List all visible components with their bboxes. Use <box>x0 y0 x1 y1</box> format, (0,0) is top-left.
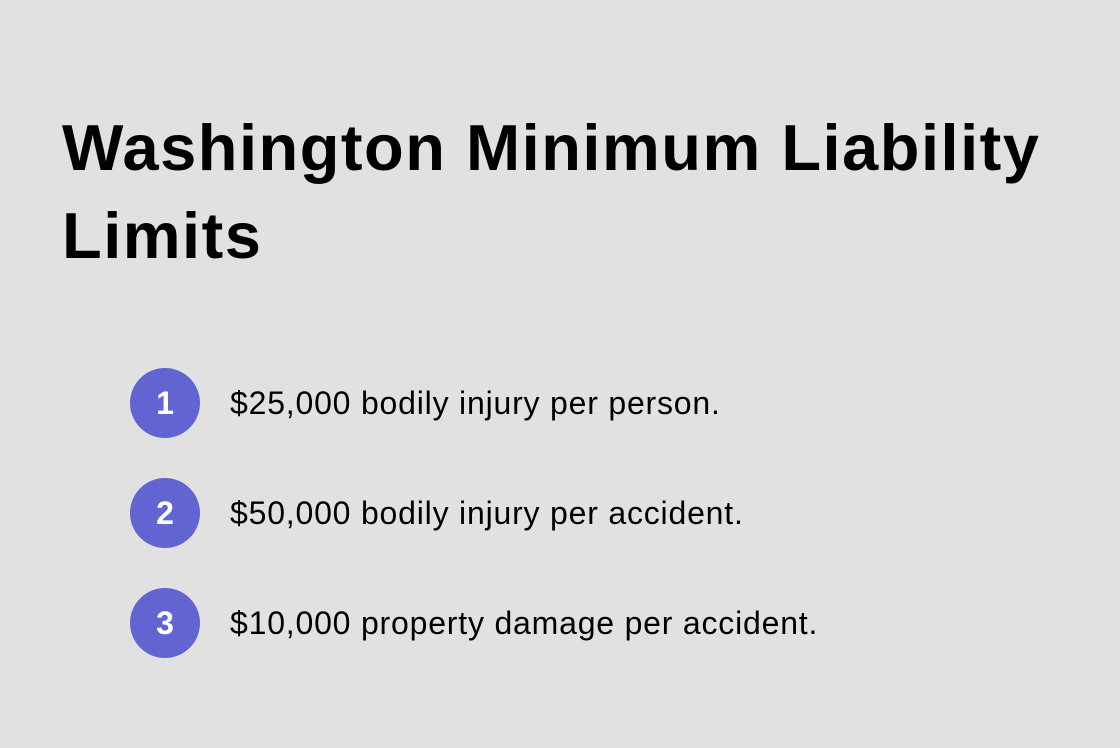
text 3: $10,000 property damage per accident. <box>230 605 818 641</box>
icon: number 1 <box>130 368 200 438</box>
item 3 <box>130 588 818 658</box>
item 1 <box>130 368 721 438</box>
icon: number 2 <box>130 478 200 548</box>
text 2: $50,000 bodily injury per accident. <box>230 495 744 531</box>
text 1: $25,000 bodily injury per person. <box>230 385 721 421</box>
icon: number 3: 3 <box>156 605 174 641</box>
title: Washington Minimum Liability Limits <box>62 111 1040 272</box>
icon: number 2: 2 <box>156 495 174 531</box>
icon: number 1: 1 <box>156 385 174 421</box>
icon: number 3 <box>130 588 200 658</box>
item 2 <box>130 478 744 548</box>
